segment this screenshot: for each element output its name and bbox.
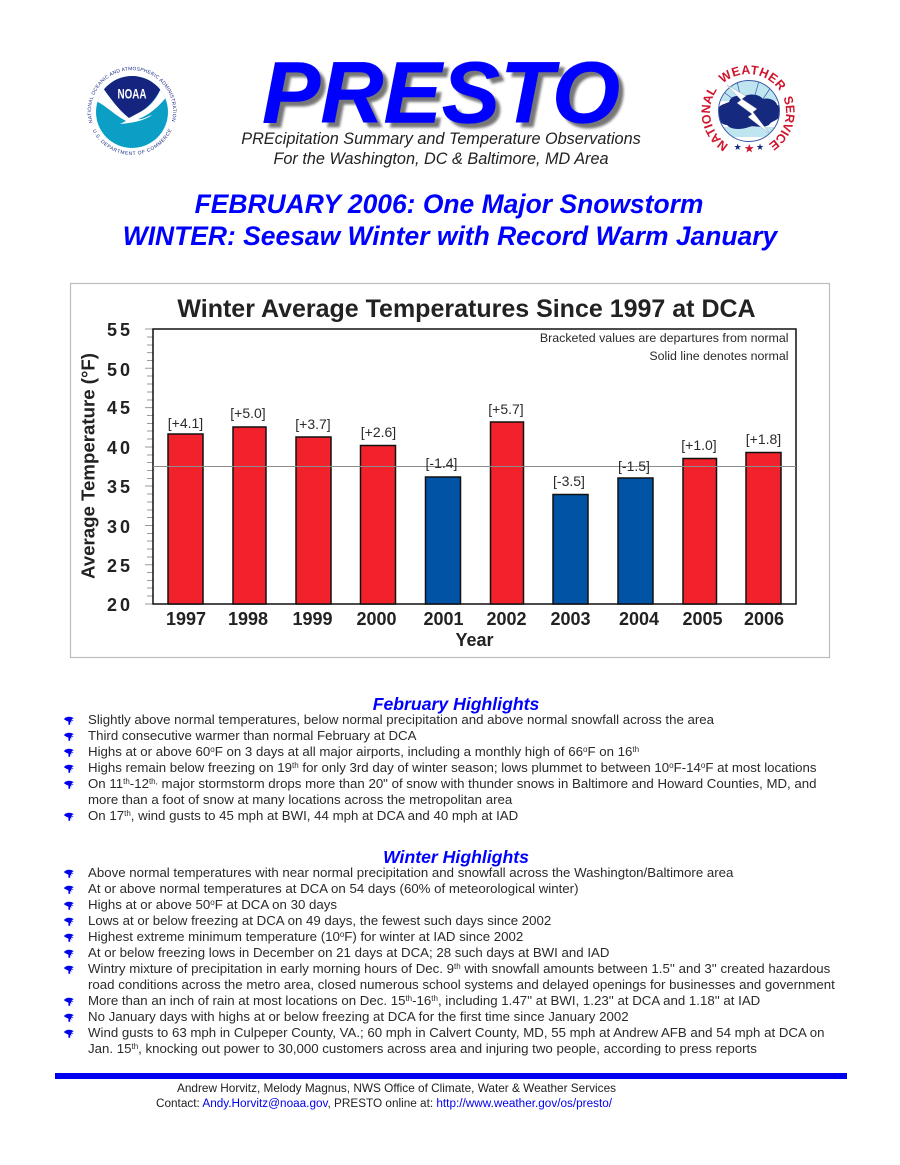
- title: PRESTO wordmark: PRESTO: [262, 45, 620, 140]
- text block: February highlights list: On 17th, wind gusts to 45 mph at BWI, 44 mph at DCA and 40 mph at IAD: [88, 808, 518, 823]
- heading: main headline: WINTER: Seesaw Winter with Record Warm January: [123, 221, 777, 251]
- text block: February highlights list: Third consecutive warmer than normal February at DCA: [88, 728, 416, 743]
- text block: February highlights list: Slightly above normal temperatures, below normal precipitation and above normal snowfall across the area: [88, 712, 714, 727]
- bar departure labels: [+5.7]: [488, 401, 524, 417]
- subtitle: PRESTO expansion and area: [241, 130, 641, 168]
- x axis labels: 2002: [486, 609, 527, 629]
- x axis labels: 2004: [619, 609, 659, 629]
- chart notes: Solid line denotes normal: [649, 349, 788, 363]
- subtitle: PRESTO expansion and area: For the Washington, DC & Baltimore, MD Area: [273, 150, 609, 168]
- y axis labels: 45: [107, 398, 133, 418]
- icon: NOAA logo: NOAA: [118, 86, 147, 102]
- bar departure labels: [-3.5]: [553, 473, 585, 489]
- heading: February Highlights: February Highlights: [373, 694, 539, 714]
- text block: Winter highlights list: Highs at or above 50oF at DCA on 30 days: [88, 897, 337, 912]
- y axis labels: 50: [107, 360, 133, 380]
- x axis labels: [166, 609, 784, 629]
- bar departure labels: [+1.0]: [681, 437, 717, 453]
- x axis labels: 2000: [356, 609, 397, 629]
- x axis labels: 1998: [228, 609, 268, 629]
- text block: Winter highlights list: No January days with highs at or below freezing at DCA for the first time since January 2002: [88, 1009, 629, 1024]
- text block: Winter highlights list: Highest extreme minimum temperature (10oF) for winter at IAD since 2002: [88, 929, 523, 944]
- text block: February highlights list: On 11th-12th, major stormstorm drops more than 20" of snow with thunder snows in Baltimore and Howard Counties, MD, and: [88, 776, 817, 791]
- panel: winter average temperature bar chart: [70, 282, 830, 658]
- x axis labels: 2005: [682, 609, 723, 629]
- bar departure labels: [168, 401, 781, 489]
- plot area: [153, 329, 796, 604]
- text block: February highlights list: more than a foot of snow at many locations across the metropolitan area: [88, 792, 512, 807]
- heading: main headline: [123, 189, 778, 251]
- icon: National Weather Service logo: NATIONAL: [701, 89, 728, 152]
- x axis labels: 1997: [166, 609, 206, 629]
- x axis title: Year: [455, 630, 494, 650]
- bar departure labels: [+3.7]: [295, 416, 331, 432]
- chart notes: [540, 331, 788, 363]
- text block: footer credits and contact: Contact: Andy.Horvitz@noaa.gov, PRESTO online at: http://www.weather.gov/os/presto/: [156, 1097, 612, 1110]
- text block: February highlights list: Highs at or above 60oF on 3 days at all major airports, including a monthly high of 66oF on 16th: [88, 744, 639, 759]
- y axis labels: 55: [107, 320, 133, 340]
- text block: Winter highlights list: Wind gusts to 63 mph in Culpeper County, VA.; 60 mph in Calvert County, MD, 55 mph at Andrew AFB and 54 mph at DCA on: [88, 1025, 824, 1040]
- bar departure labels: [+2.6]: [361, 424, 396, 440]
- y axis labels: 25: [107, 556, 133, 576]
- text block: Winter highlights list: [64, 865, 835, 1056]
- y axis labels: 20: [107, 595, 133, 615]
- icon: National Weather Service logo: [701, 65, 795, 156]
- normal line: [153, 466, 796, 468]
- y axis labels: 40: [107, 438, 133, 458]
- x axis labels: 1999: [292, 609, 333, 629]
- icon: National Weather Service logo: SERVICE: [768, 96, 795, 151]
- text block: Winter highlights list: Wintry mixture of precipitation in early morning hours of Dec. 9th with snowfall amounts between 1.5'' and 3'' created hazardous: [88, 961, 830, 976]
- text block: Winter highlights list: Above normal temperatures with near normal precipitation and snowfall across the Washington/Baltimore area: [88, 865, 733, 880]
- bar departure labels: [-1.4]: [426, 455, 457, 471]
- icon: National Weather Service logo: WEATHER: [718, 65, 786, 91]
- text block: Winter highlights list: At or below freezing lows in December on 21 days at DCA; 28 such days at BWI and IAD: [88, 945, 609, 960]
- y axis labels: 35: [107, 477, 133, 497]
- bar departure labels: [+5.0]: [230, 405, 266, 421]
- y axis labels: 30: [107, 517, 133, 537]
- chart title: Winter Average Temperatures Since 1997 at DCA: [177, 295, 756, 323]
- y axis title: Average Temperature (°F): [78, 353, 98, 579]
- bar departure labels: [-1.5]: [618, 458, 650, 474]
- text block: footer credits and contact: Andrew Horvitz, Melody Magnus, NWS Office of Climate, Water & Weather Services: [177, 1081, 616, 1095]
- icon: National Weather Service logo: ★: [734, 143, 742, 153]
- text block: Winter highlights list: At or above normal temperatures at DCA on 54 days (60% of meteorological winter): [88, 881, 578, 896]
- text block: Winter highlights list: Jan. 15th, knocking out power to 30,000 customers across area and injuring two people, according to press reports: [88, 1041, 757, 1056]
- text block: February highlights list: [64, 712, 817, 823]
- bars: [168, 422, 781, 604]
- heading: main headline: FEBRUARY 2006: One Major Snowstorm: [195, 189, 703, 219]
- icon: NOAA logo: U.S. DEPARTMENT OF COMMERCE: [93, 128, 172, 155]
- icon: National Weather Service logo: ★: [756, 143, 764, 153]
- footer rule: [55, 1073, 847, 1079]
- text block: February highlights list: Highs remain below freezing on 19th for only 3rd day of winter season; lows plummet to between 10oF-14oF at most locations: [88, 760, 817, 775]
- y axis minor ticks: [145, 329, 153, 604]
- subtitle: PRESTO expansion and area: PREcipitation Summary and Temperature Observations: [241, 130, 641, 148]
- text block: footer credits and contact: [156, 1081, 616, 1110]
- bar departure labels: [+4.1]: [168, 415, 203, 431]
- heading: Winter Highlights: Winter Highlights: [383, 846, 529, 866]
- x axis labels: 2003: [550, 609, 591, 629]
- x axis labels: 2001: [423, 609, 464, 629]
- y axis labels: [107, 320, 133, 615]
- chart notes: Bracketed values are departures from normal: [540, 331, 788, 345]
- x axis labels: 2006: [744, 609, 784, 629]
- text block: Winter highlights list: Lows at or below freezing at DCA on 49 days, the fewest such days since 2002: [88, 913, 551, 928]
- text block: Winter highlights list: More than an inch of rain at most locations on Dec. 15th-16th, including 1.47'' at BWI, 1.23'' at DCA and 1.18'' at IAD: [88, 993, 760, 1008]
- icon: NOAA logo: NATIONAL OCEANIC AND ATMOSPHERIC ADMINISTRATION: [88, 66, 176, 123]
- icon: National Weather Service logo: ★: [744, 142, 755, 156]
- bar departure labels: [+1.8]: [746, 431, 781, 447]
- icon: NOAA logo: [88, 66, 176, 155]
- text block: Winter highlights list: road conditions across the metro area, closed numerous school systems and delayed openings for businesses and government: [88, 977, 835, 992]
